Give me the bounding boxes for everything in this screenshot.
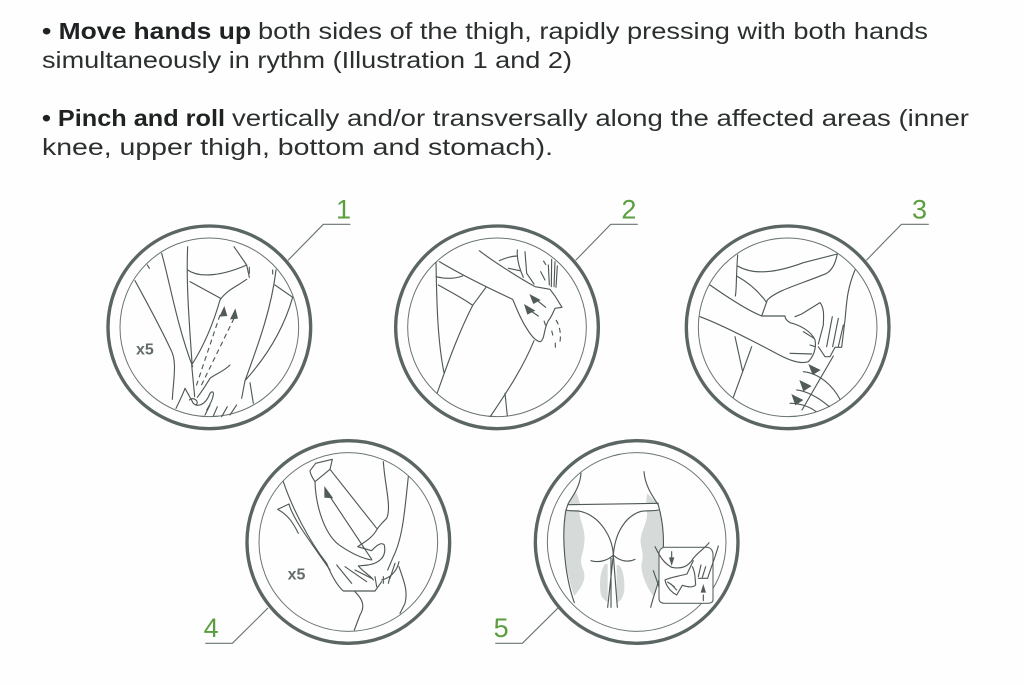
instruction text: move hands up: simultaneously in rythm (Illustration 1 and 2) — [42, 47, 572, 73]
step number 2: 2 — [621, 194, 636, 224]
legs and hands drawing 3 — [700, 254, 855, 412]
repetition label x5: x5 — [136, 342, 154, 359]
instruction text: move hands up: • Move hands up — [42, 18, 251, 44]
illustration 1 — [108, 194, 351, 429]
leader line 3 — [867, 224, 928, 260]
leader line 2 — [576, 224, 637, 260]
legs and hands drawing 1 — [135, 247, 293, 417]
illustration 3 — [686, 194, 928, 429]
instruction text: move hands up: both sides of the thigh, rapidly pressing with both hands — [258, 18, 928, 44]
leader line 1 — [288, 224, 350, 260]
cellulite shaded areas — [564, 492, 663, 603]
inset: pinch and roll — [653, 543, 718, 603]
illustration 4 — [204, 441, 450, 643]
instruction text: pinch and roll — [42, 105, 969, 160]
instruction text: pinch and roll: vertically and/or transversally along the affected areas (inner — [232, 105, 969, 131]
step number 5: 5 — [494, 613, 509, 643]
instruction text: pinch and roll: • Pinch and roll — [42, 105, 225, 131]
instruction text: move hands up — [42, 18, 928, 73]
step number 1: 1 — [336, 194, 351, 224]
leader line 5 — [496, 608, 558, 643]
back view drawing — [564, 472, 663, 607]
illustration 2 — [396, 194, 637, 429]
leader line 4 — [206, 608, 268, 643]
step number 3: 3 — [912, 194, 927, 224]
illustration 5 — [494, 441, 738, 643]
step number 4: 4 — [204, 613, 219, 643]
instruction text: pinch and roll: knee, upper thigh, bottom and stomach). — [42, 134, 553, 160]
arms and legs drawing 4 — [278, 459, 408, 630]
leg and hand drawing 2 — [436, 250, 562, 416]
repetition label x5: x5 — [288, 566, 306, 583]
